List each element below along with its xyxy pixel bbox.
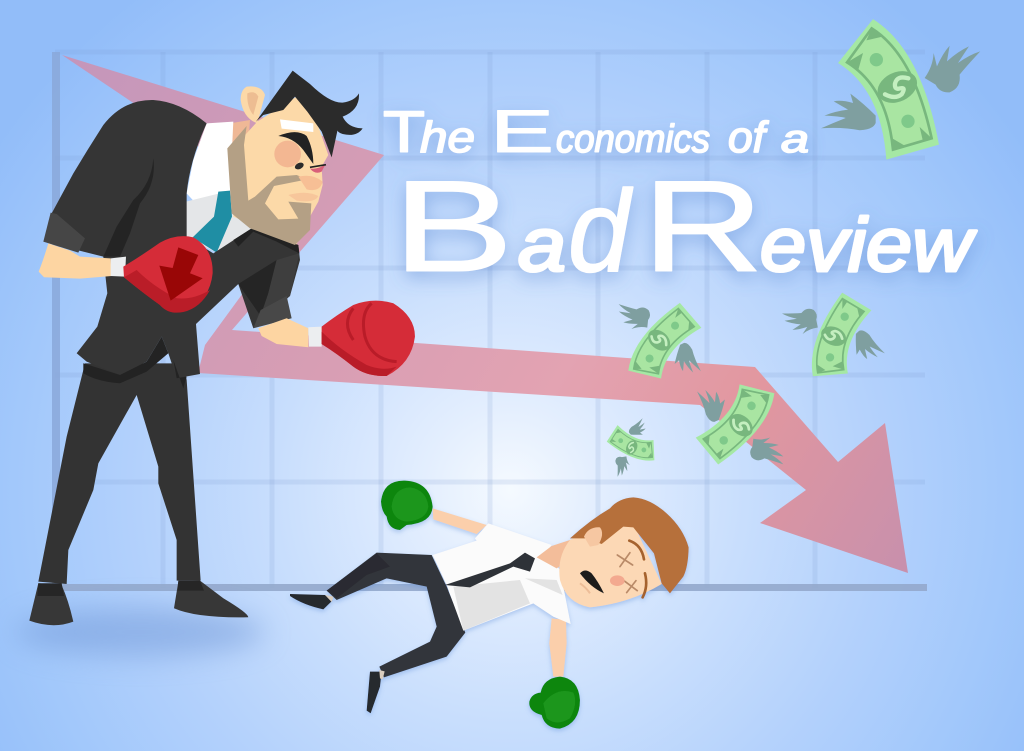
sleeve right <box>253 296 292 328</box>
wrist band right <box>308 327 323 347</box>
chart grid <box>52 52 927 592</box>
pants <box>327 553 465 677</box>
hair <box>256 71 363 157</box>
hair <box>570 497 689 593</box>
standing boss: upper body <box>39 71 415 388</box>
title line 1: E <box>490 98 554 165</box>
cheek <box>274 141 301 167</box>
eye <box>294 161 305 171</box>
jacket shadows <box>103 158 154 257</box>
x eyes <box>617 553 637 593</box>
shirt <box>433 523 571 631</box>
title line 1: conomics <box>556 118 710 161</box>
arm upper <box>433 508 487 534</box>
left shoe <box>29 583 73 625</box>
flying money: bill centre <box>679 363 802 493</box>
eyebrow white patch <box>280 119 313 132</box>
nose and mouth <box>298 176 323 190</box>
right boxing glove <box>322 301 415 376</box>
nose <box>610 575 625 586</box>
title line 1: a <box>781 118 809 161</box>
shoes <box>290 594 332 609</box>
title line 1: T <box>383 100 425 165</box>
flying money: bill left <box>601 277 718 399</box>
floor shadow <box>15 608 265 656</box>
falling trend arrow <box>62 55 908 573</box>
face <box>228 97 328 244</box>
rolled sleeve left <box>43 213 85 253</box>
beard <box>227 126 311 245</box>
title line 2: eview <box>760 203 976 288</box>
wrist band left <box>111 257 126 277</box>
mouth <box>580 570 604 593</box>
tie <box>193 191 232 253</box>
tie <box>445 553 535 587</box>
eyebrow <box>278 132 313 164</box>
jacket <box>44 100 300 378</box>
title line 1: he <box>420 113 475 162</box>
boxing glove with arrow <box>123 236 213 313</box>
title <box>383 98 976 299</box>
lower arm <box>549 618 567 677</box>
neck <box>537 540 573 568</box>
shirt <box>187 122 233 201</box>
right shoe <box>174 581 248 617</box>
flying money: small bill <box>592 410 669 486</box>
ear <box>241 86 265 123</box>
ear <box>584 527 602 547</box>
face <box>559 523 662 607</box>
title line 1: of <box>728 113 770 162</box>
knocked-out man <box>290 481 689 729</box>
title line 2: a <box>518 203 566 288</box>
forearm left <box>39 243 112 279</box>
flying money: large bill <box>821 19 980 160</box>
title line 2: d <box>568 166 633 296</box>
title line 2: R <box>642 153 764 299</box>
green glove top <box>381 481 433 530</box>
neck <box>220 120 250 170</box>
title line 2: B <box>392 153 514 299</box>
brows <box>629 541 646 597</box>
forearm right <box>258 318 308 347</box>
standing boss: legs <box>29 363 248 625</box>
flying money: bill right <box>767 267 899 400</box>
green glove bottom <box>529 677 580 729</box>
